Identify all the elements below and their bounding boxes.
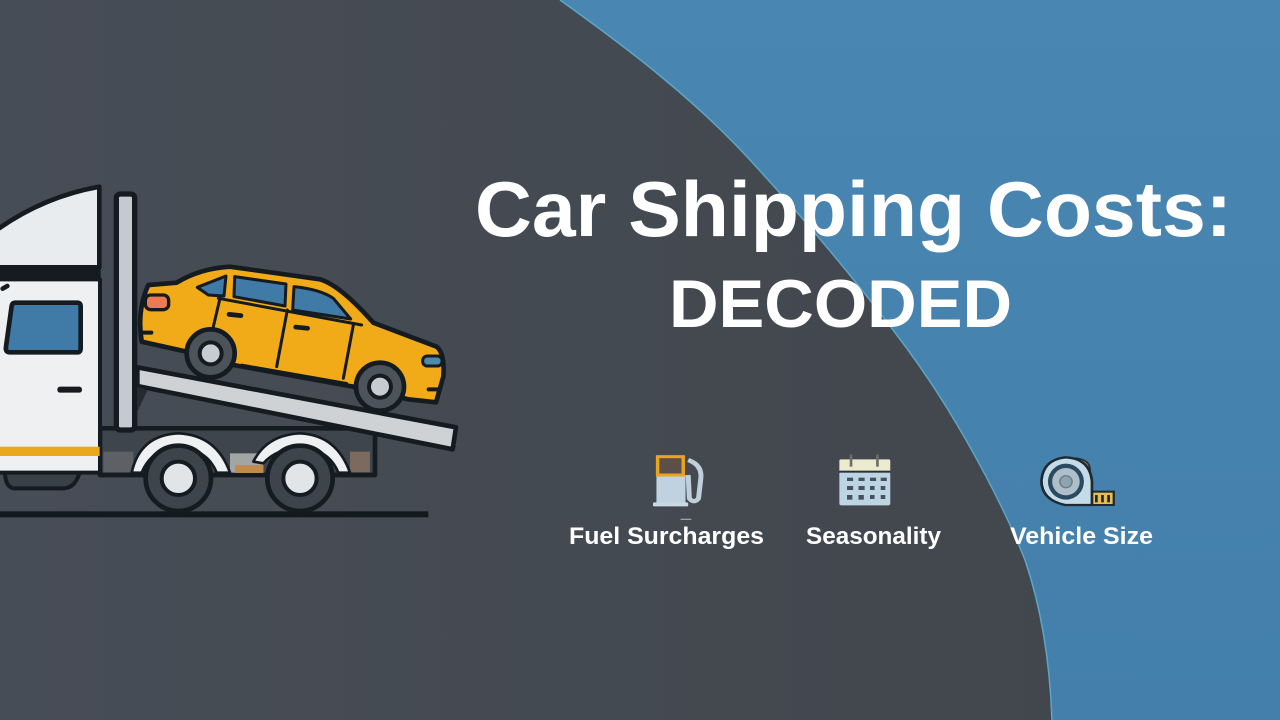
subtitle: DECODED <box>669 266 1012 342</box>
exhaust pillar <box>116 194 135 430</box>
blue curved panel <box>560 0 1280 720</box>
label: fuel surcharges: Fuel Surcharges <box>569 523 764 550</box>
ramp strut <box>137 387 147 412</box>
icon: tape measure <box>1041 457 1114 505</box>
label: seasonality: Seasonality <box>806 523 942 550</box>
label: vehicle size: Vehicle Size <box>1010 523 1153 550</box>
truck chassis <box>100 428 375 475</box>
ramp <box>137 367 456 449</box>
truck cab <box>0 187 101 473</box>
truck wheels <box>132 433 350 511</box>
ground line <box>0 511 428 517</box>
icon: calendar <box>839 455 890 505</box>
title: Car Shipping Costs: <box>475 165 1232 253</box>
yellow car <box>140 267 444 411</box>
cab underside <box>5 472 80 488</box>
icon: fuel pump <box>653 457 701 520</box>
illustration: flatbed truck with yellow car <box>0 187 456 517</box>
